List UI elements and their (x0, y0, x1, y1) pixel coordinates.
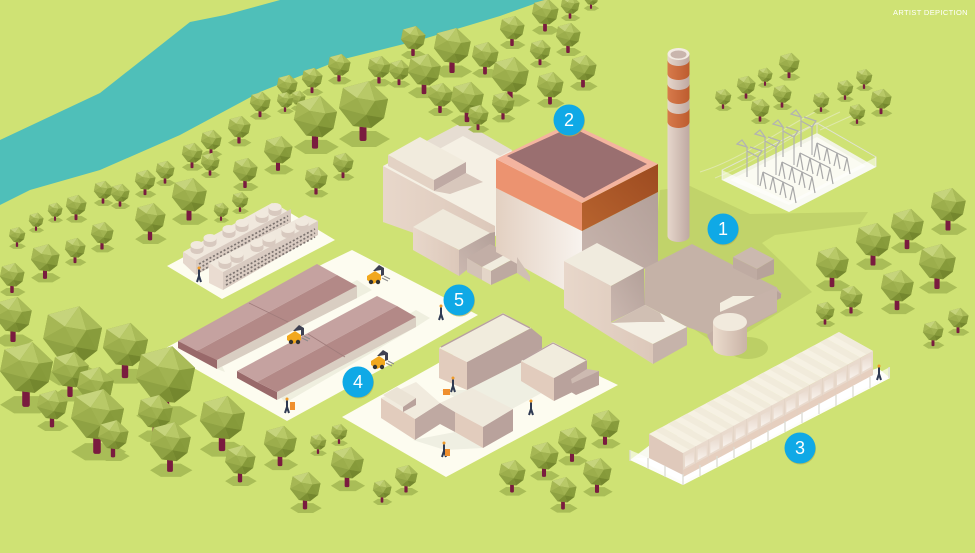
chimney (668, 48, 690, 242)
storage tank (713, 313, 747, 356)
pad: warehouse yard (162, 250, 478, 421)
warehouse: front (237, 296, 430, 403)
badge 2 (554, 104, 585, 136)
caption: artist depiction: ARTIST DEPICTION (893, 8, 968, 17)
building: left turbine hall (383, 122, 520, 285)
building: small support hall (521, 342, 599, 401)
warehouse: back (178, 264, 372, 372)
building: tall support hall (439, 313, 575, 410)
building: fuel block (564, 243, 782, 364)
badge 1 (708, 214, 739, 246)
building: cooling units (183, 203, 318, 290)
building 3: long hall with fence (630, 332, 890, 485)
pad: support buildings (342, 345, 618, 477)
badge 4 (342, 366, 374, 398)
substation gantries (760, 143, 850, 203)
building: workshop (381, 382, 513, 450)
badge 4: 4 (353, 372, 363, 392)
badge 2: 2 (564, 110, 574, 130)
badge 5 (444, 284, 475, 316)
badge 5: 5 (454, 290, 464, 310)
badge 3 (784, 432, 816, 464)
substation pylons (737, 110, 816, 185)
workers and forklifts (197, 265, 881, 457)
badge 1: 1 (718, 219, 728, 239)
pad: cooling units (167, 206, 335, 299)
building: reactor block (496, 123, 658, 300)
ground shadow: main plant (650, 186, 868, 348)
substation (700, 110, 876, 212)
badge 3: 3 (795, 438, 805, 458)
ground shadow: tank (728, 337, 768, 359)
river (0, 0, 545, 205)
